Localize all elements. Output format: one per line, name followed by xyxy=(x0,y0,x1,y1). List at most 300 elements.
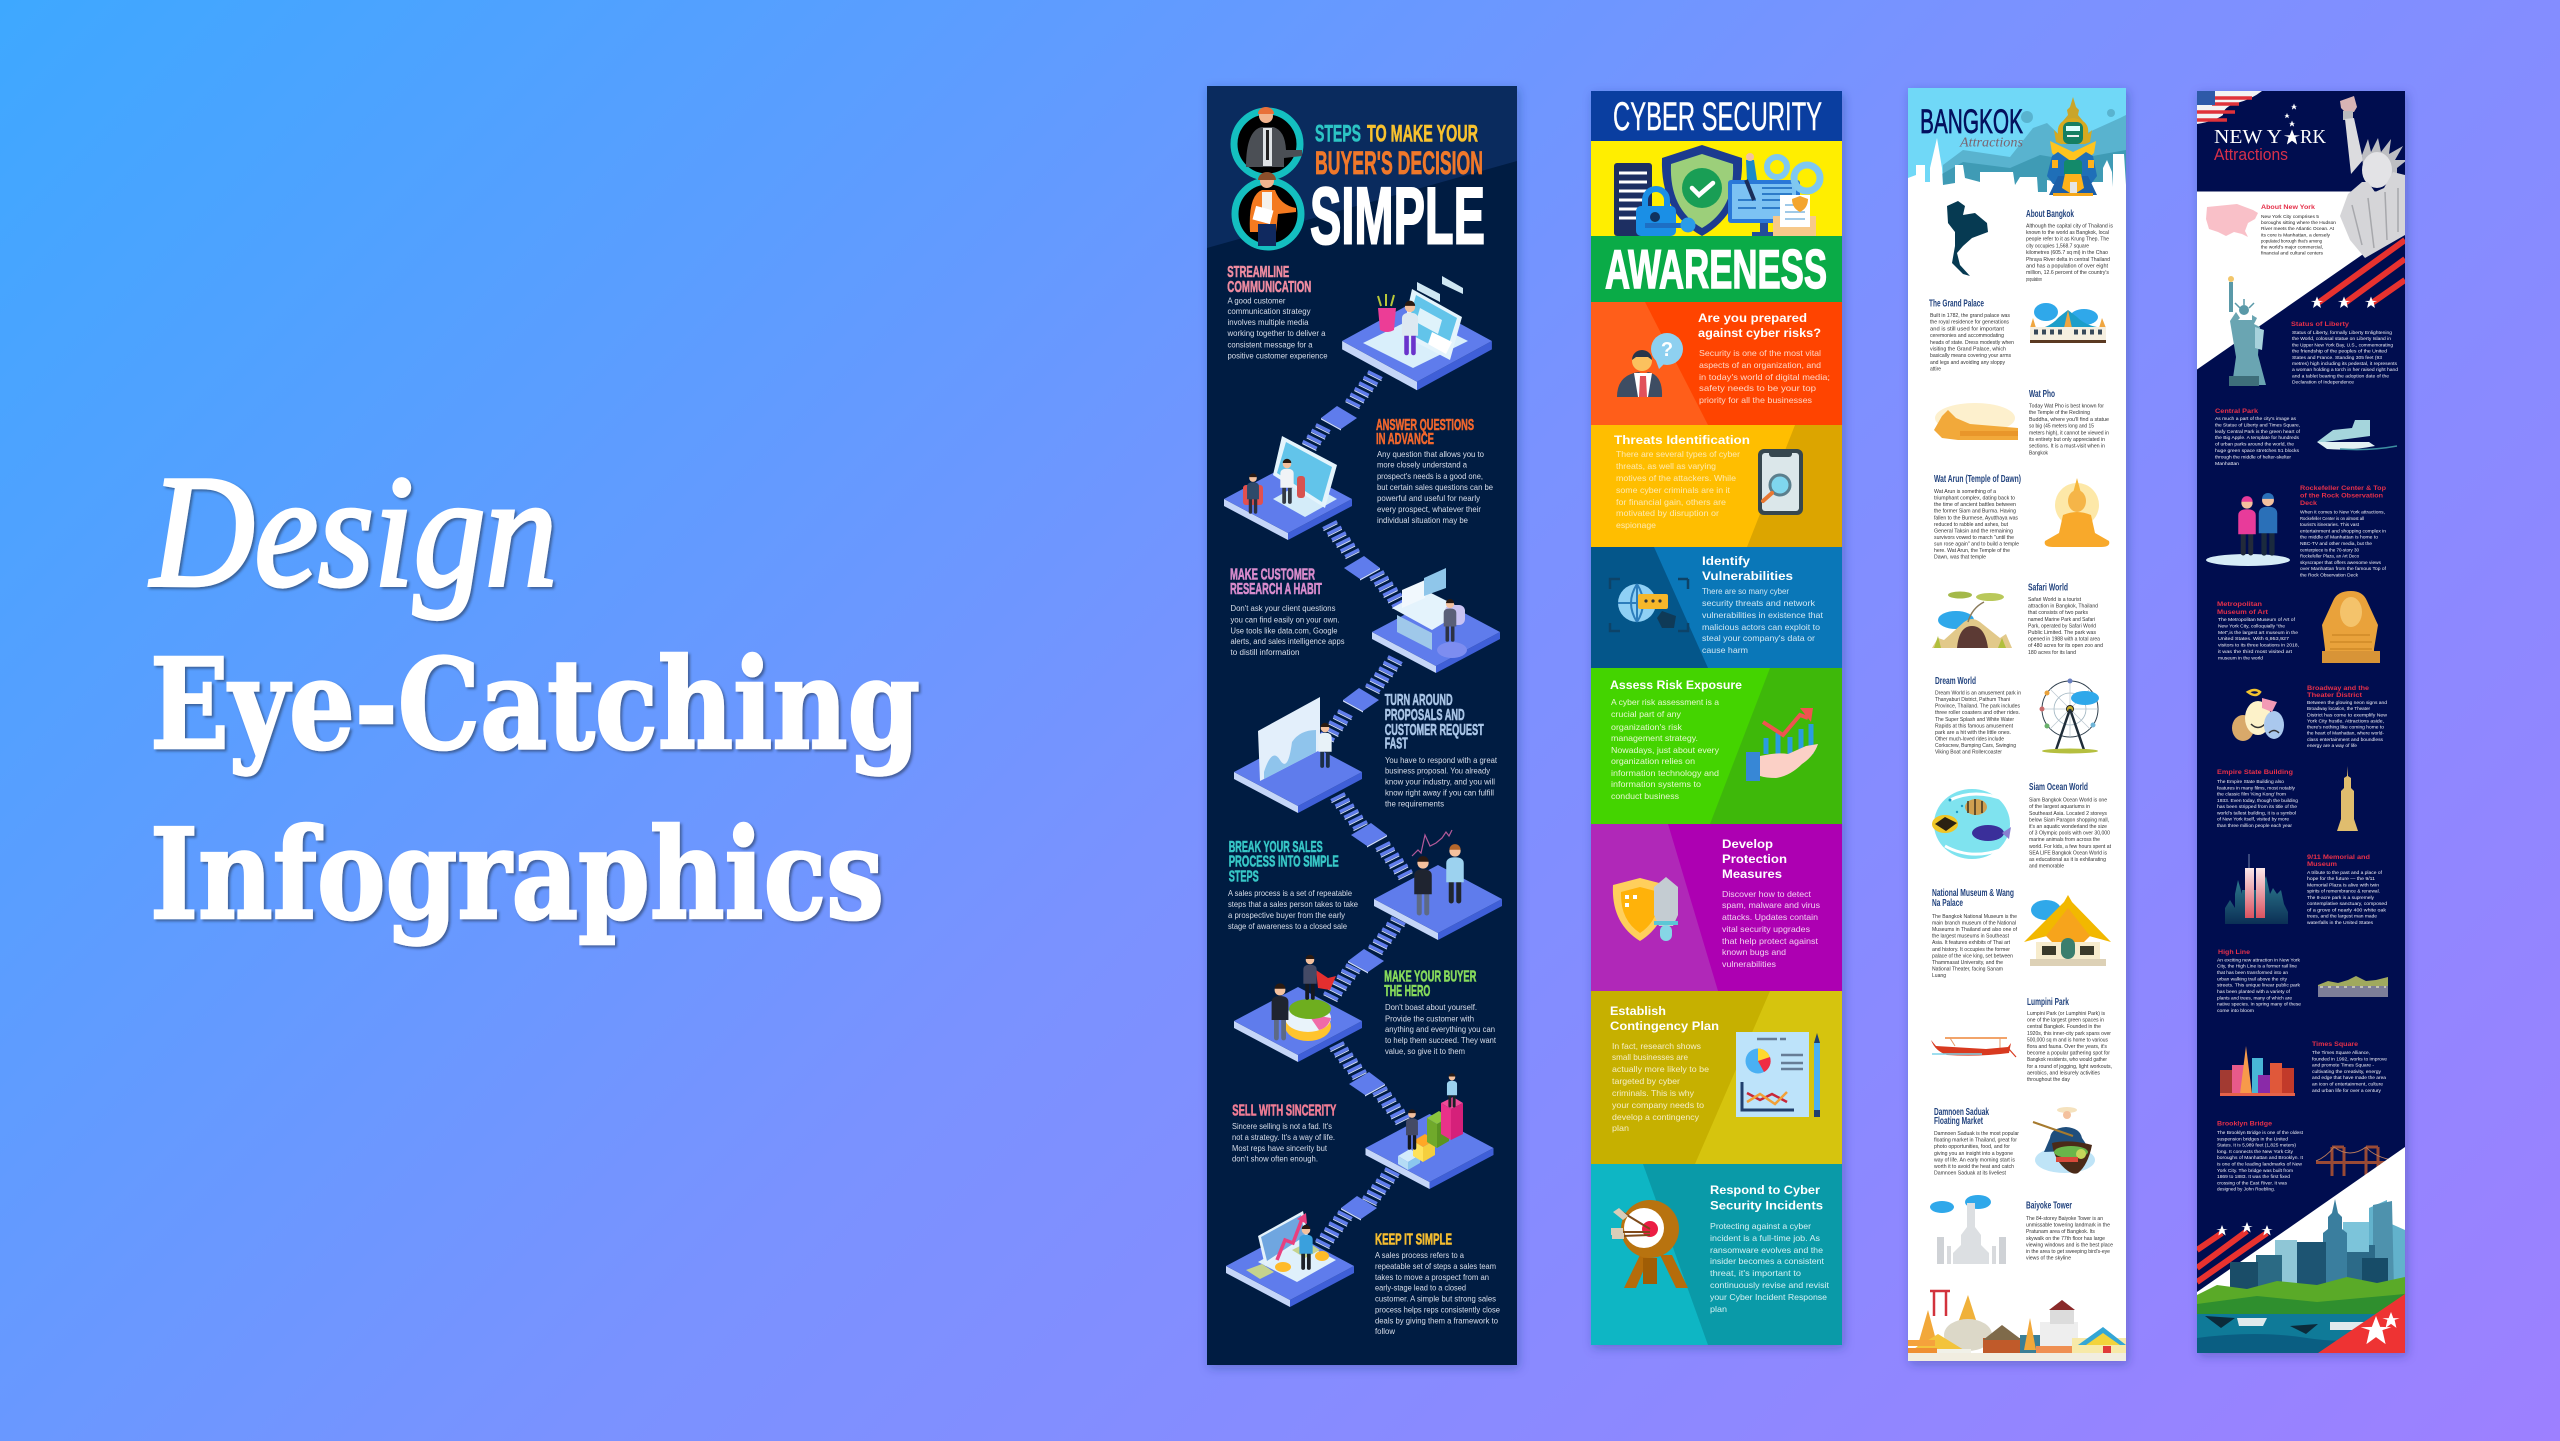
block: About Bangkok: city occupies 1,568.7 square xyxy=(2026,243,2089,249)
section: identify vulnerabilities: steal your company's data or xyxy=(1702,633,1815,643)
section: establish contingency plan: actually more likely to be xyxy=(1612,1064,1709,1074)
illustration: floating market boat xyxy=(2033,1107,2095,1174)
block: Central Park: As much a part of the city's image as xyxy=(2215,416,2297,422)
heading: steps to make your buyer's decision simple: TO MAKE YOUR xyxy=(1367,120,1478,148)
step 8 text: deals by giving them a framework to xyxy=(1375,1316,1499,1326)
block: National Museum: The Bangkok National Museum is the xyxy=(1932,914,2017,920)
block: Metropolitan Museum of Art: it was the third most visited art xyxy=(2218,649,2293,655)
block: Statue of Liberty: Status of Liberty xyxy=(2291,321,2349,328)
block: Siam Ocean World: it's an aquatic wonderland the size xyxy=(2029,824,2107,830)
section: assess risk exposure: A cyber risk assessment is a xyxy=(1611,697,1719,707)
block: Dream World: three roller coasters and other rides. xyxy=(1935,710,2020,716)
block: Brooklyn Bridge: The Brooklyn Bridge is one of the oldest xyxy=(2217,1130,2304,1136)
step 4 text: business proposal. You already xyxy=(1385,767,1490,776)
block: Empire State Building: world's tallest building, it is a symbol xyxy=(2217,810,2296,816)
block: National Museum: and history. It occupies the former xyxy=(1932,947,2010,953)
section: are you prepared xyxy=(1591,302,1842,425)
step 4 text: know your industry, and you will xyxy=(1385,778,1495,787)
step 5 text: steps that a sales person takes to take xyxy=(1228,900,1359,909)
block: Siam Ocean World: of the largest aquariums in xyxy=(2029,804,2090,810)
block: Dream World: Dream World is an amusement park in xyxy=(1935,690,2021,696)
block: Baiyoke Tower: viewing windows and is the best place xyxy=(2026,1242,2113,1248)
section: are you prepared: safety needs to be your top xyxy=(1699,383,1816,393)
step 7 text: Most reps have sincerity but xyxy=(1232,1144,1328,1153)
block: 9/11 Memorial: Memorial Plaza is alive with twin xyxy=(2307,882,2379,888)
section: are you prepared: priority for all the businesses xyxy=(1699,395,1812,405)
illustration: Times Square skyline xyxy=(2220,1046,2295,1096)
section: assess risk exposure: Nowadays, just about every xyxy=(1611,745,1720,755)
icon: report with charts and pen xyxy=(1736,1032,1820,1117)
block: Metropolitan Museum of Art: Museum of Art xyxy=(2217,609,2269,616)
block: Empire State Building xyxy=(2217,769,2298,829)
block: Times Square: founded in 1992, works to improve xyxy=(2312,1056,2387,1062)
step 8 text: KEEP IT SIMPLE xyxy=(1375,1231,1452,1248)
block: Empire State Building: has been stripped from its title of the xyxy=(2217,804,2297,810)
section: threats identification: for financial gain, others are xyxy=(1616,497,1726,507)
step 1 text: positive customer experience xyxy=(1228,351,1328,360)
block: National Museum xyxy=(1932,887,2018,979)
block: Broadway: Broadway location, the Theater xyxy=(2307,706,2370,712)
illustration: twin towers memorial xyxy=(2225,854,2288,924)
block: Times Square: an icon of entertainment, culture xyxy=(2312,1082,2383,1088)
block: 9/11 Memorial: hope for the future — the 9/11 xyxy=(2307,876,2375,882)
block: Baiyoke Tower: Pratunam area of Bangkok. Its xyxy=(2026,1229,2096,1235)
step 7 text: Sincere selling is not a fad. It's xyxy=(1232,1122,1332,1131)
block: About New York: the world's major commercial, xyxy=(2261,244,2323,250)
block: Metropolitan Museum of Art: The Metropolitan Museum of Art of xyxy=(2218,617,2296,623)
block: Lumpini Park: flora and fauna. Over the years, it's xyxy=(2027,1044,2108,1050)
section: develop protection measures: Measures xyxy=(1722,867,1782,881)
block: Brooklyn Bridge: crossing of the East River. It was xyxy=(2217,1180,2288,1186)
heading: New York: NEW Y xyxy=(2214,127,2282,148)
icon: giant guardian statue xyxy=(2047,97,2097,196)
block: About New York: About New York xyxy=(2261,204,2315,211)
block: Broadway: District has come to exemplify New xyxy=(2307,712,2387,718)
block: Metropolitan Museum of Art: museum in the world xyxy=(2218,655,2263,661)
section: develop protection measures: spam, malware and virus xyxy=(1722,900,1820,910)
block: Metropolitan Museum of Art: Met",is the largest art museum in the xyxy=(2218,630,2298,636)
illustration: Empire State Building xyxy=(2337,766,2358,831)
block: Broadway: Between the glowing neon signs and xyxy=(2307,700,2387,706)
block: High Line: urban walking trail above the city xyxy=(2217,976,2288,982)
block: High Line: native species. In spring many of these xyxy=(2217,1002,2301,1008)
step 3 text: MAKE CUSTOMER xyxy=(1230,566,1315,584)
step 7 illustration: growing 3D bars xyxy=(1366,1073,1494,1189)
block: Rockefeller Center: Rockefeller Plaza, an Art Deco xyxy=(2300,554,2359,560)
section: assess risk exposure xyxy=(1591,668,1842,824)
block: Damnoen Saduak: floating market in Thailand, great for xyxy=(1934,1138,2017,1144)
section: assess risk exposure: crucial part of any xyxy=(1611,709,1682,719)
heading: steps to make your buyer's decision simple: STEPS xyxy=(1315,120,1361,148)
block: Broadway: class entertainment and boundless xyxy=(2307,737,2384,743)
block: Times Square: and promote Times Square - xyxy=(2312,1063,2374,1069)
block: Damnoen Saduak: Damnoen Saduak xyxy=(1934,1106,1989,1118)
block: National Museum: National Theater, facing Sanam xyxy=(1932,966,2003,972)
step 7 text: SELL WITH SINCERITY xyxy=(1232,1103,1336,1120)
illustration: ice skating couple xyxy=(2206,493,2290,566)
block: Statue of Liberty: the Upper New York Bay, U.S., commemorating xyxy=(2292,342,2393,348)
block: About Bangkok: people refer to it as Krung Thep. The xyxy=(2026,237,2109,243)
block: Wat Arun: reduced to rabble and ashes, but xyxy=(1934,522,2009,528)
block: National Museum: palace of the vice king, set between xyxy=(1932,953,2013,959)
step 1 text xyxy=(1227,264,1328,360)
illustration: Thai palace xyxy=(2024,895,2111,966)
block: Safari World: named Marine Park and Safari xyxy=(2028,617,2095,623)
step 7 text: not a strategy. It's a way of life. xyxy=(1232,1133,1335,1142)
block: Lumpini Park: central Bangkok. Founded in the xyxy=(2027,1024,2101,1030)
panel: Bangkok attractions xyxy=(1905,88,2126,1361)
block: National Museum: Museums in Thailand and also one of xyxy=(1932,927,2018,933)
block: About New York: populated borough that's among xyxy=(2261,238,2322,244)
block: Broadway: energy are a way of life xyxy=(2307,743,2357,749)
section: respond to incidents xyxy=(1591,1164,1842,1345)
block: About Bangkok: million, 12.6 percent of the country's xyxy=(2026,270,2110,276)
title line: Eye-Catching: Eye-Catching xyxy=(150,632,920,778)
section: respond to incidents: insider becomes a consistent xyxy=(1710,1256,1825,1266)
block: Dream World: Thanyaburi District, Pathum Thani xyxy=(1935,697,2010,703)
block: 9/11 Memorial: waterfalls in the United States xyxy=(2307,920,2374,926)
section: assess risk exposure: organization relies on xyxy=(1611,756,1695,766)
block: Empire State Building: the classic film 'King Kong' from xyxy=(2217,792,2286,798)
step 1 text: involves multiple media xyxy=(1228,318,1309,327)
block: Central Park: of urban parks around the world, the xyxy=(2215,442,2294,448)
block: Lumpini Park: become a popular gathering spot for xyxy=(2027,1051,2110,1057)
block: The Grand Palace: heads of state. Dress modestly when xyxy=(1930,340,2014,346)
block: Brooklyn Bridge: Brooklyn Bridge xyxy=(2217,1120,2272,1128)
step 1 text: A good customer xyxy=(1228,296,1286,305)
title xyxy=(149,442,920,948)
heading: steps to make your buyer's decision simple: SIMPLE xyxy=(1310,172,1485,262)
block: About New York: its core is Manhattan, a densely xyxy=(2261,232,2331,238)
block: The Grand Palace: ceremonies and accommodating xyxy=(1930,333,2004,339)
step 6 text xyxy=(1384,968,1497,1056)
icon: statue of liberty bust xyxy=(2340,96,2407,258)
block: Central Park: the Statue of Liberty and Times Square, xyxy=(2215,422,2300,428)
illustration: white temple with clouds xyxy=(1930,1195,2006,1264)
block: Siam Ocean World: Southeast Asia. Located 2 storeys xyxy=(2029,811,2108,817)
section: develop protection measures: vital security upgrades xyxy=(1722,924,1810,934)
block: Baiyoke Tower: unmissable towering landmark in the xyxy=(2026,1223,2110,1229)
block: Brooklyn Bridge: 1869 to 1883. It was the first fixed xyxy=(2217,1174,2290,1180)
block: Rockefeller Center: tourist's itineraries. This vast xyxy=(2300,522,2360,528)
step 3 text: alerts, and sales intelligence apps xyxy=(1230,637,1344,646)
block: About Bangkok: and has a population of over eight xyxy=(2026,264,2109,270)
step 6 text: Provide the customer with xyxy=(1385,1014,1474,1023)
illustration: aquarium fish xyxy=(1932,789,2011,859)
step 4 text: the requirements xyxy=(1385,799,1444,808)
section: identify vulnerabilities: security threats and network xyxy=(1702,598,1816,608)
section: respond to incidents: threat, it's important to xyxy=(1710,1268,1801,1278)
step 4 text xyxy=(1385,692,1498,808)
section: develop protection measures: known bugs and xyxy=(1722,947,1786,957)
block: Rockefeller Center: Deck xyxy=(2300,500,2317,507)
block: Safari World: Safari World is a tourist xyxy=(2028,597,2082,603)
section: respond to incidents: plan xyxy=(1710,1304,1727,1314)
block: Brooklyn Bridge: designed by John Roebling. xyxy=(2217,1187,2275,1193)
illustration: High Line park xyxy=(2318,976,2388,997)
block: Broadway: there's nothing like coming home to xyxy=(2307,725,2384,731)
block: Dream World: Corkscrew, Bumping Cars, Swinging xyxy=(1935,743,2016,749)
section: establish contingency plan: criminals. This is why xyxy=(1612,1088,1695,1098)
block: The Grand Palace: visiting the Grand Palace, which xyxy=(1930,346,2006,352)
block: Rockefeller Center: of the Rock Observation xyxy=(2300,492,2383,500)
block: Empire State Building: than three million people each year xyxy=(2217,823,2292,829)
block: Wat Arun: triumphant complex, dating back to xyxy=(1934,496,2015,502)
icon: hand holding growth chart xyxy=(1746,708,1818,781)
block: Central Park: Manhattan xyxy=(2215,461,2239,467)
icon: person with question bubble xyxy=(1617,333,1683,397)
panel: cyber security awareness xyxy=(1591,91,1842,1345)
block: Safari World: opened in 1988 with a total area xyxy=(2028,637,2100,643)
section: assess risk exposure: Assess Risk Exposure xyxy=(1610,678,1742,692)
block: Rockefeller Center xyxy=(2300,485,2387,578)
red diagonal stripes with stars xyxy=(2311,240,2405,308)
block: 9/11 Memorial: spirits of remembrance & renewal. xyxy=(2307,889,2380,895)
section: develop protection measures: Discover how to detect xyxy=(1722,889,1812,899)
step 2 illustration: meeting on a laptop xyxy=(1224,436,1352,540)
section: identify vulnerabilities: cause harm xyxy=(1702,645,1748,655)
block: About Bangkok: Phraya River delta in central Thailand xyxy=(2026,257,2110,263)
block: Baiyoke Tower: Baiyoke Tower xyxy=(2026,1200,2072,1212)
block: Times Square: cultivating the creativity, energy xyxy=(2312,1069,2382,1075)
step 2 text: every prospect, whatever their xyxy=(1377,505,1481,514)
block: About Bangkok: population xyxy=(2026,277,2042,283)
block: Siam Ocean World xyxy=(2029,781,2112,870)
block: Statue of Liberty: States and France. Standing 305 feet (93 xyxy=(2292,355,2382,361)
section: are you prepared: Are you prepared xyxy=(1698,311,1807,325)
block: About New York: boroughs sitting where the Hudson xyxy=(2261,220,2336,226)
illustration: sphinx xyxy=(2322,591,2380,663)
heading: New York xyxy=(2214,104,2326,164)
illustration: cruise ship xyxy=(2317,420,2397,450)
block: National Museum: Thammasat University, and the xyxy=(1932,960,2003,966)
section: threats identification: Threats Identification xyxy=(1614,433,1750,447)
section: identify vulnerabilities: Vulnerabilities xyxy=(1702,569,1793,583)
icon: teal statue of liberty xyxy=(2228,276,2266,386)
block: Lumpini Park: Bangkok residents, who would gather xyxy=(2027,1057,2107,1063)
step 6 text: MAKE YOUR BUYER xyxy=(1384,968,1477,985)
section: develop protection measures: attacks. Updates contain xyxy=(1722,912,1818,922)
block: Empire State Building: 1933. Even today, though the building xyxy=(2217,798,2298,804)
block: Rockefeller Center: over Manhattan from the famous Top of xyxy=(2300,566,2387,572)
block: Dream World: The Super Splash and White Water xyxy=(1935,717,2014,723)
block: The Grand Palace: basically means covering your arms xyxy=(1930,353,2012,359)
section: threats identification: motivated by disruption or xyxy=(1616,508,1719,518)
heading: New York: Attractions xyxy=(2214,145,2288,164)
block: 9/11 Memorial: contemplative sanctuary, composed xyxy=(2307,901,2387,907)
section: threats identification: some cyber criminals are in it xyxy=(1616,485,1731,495)
section: develop protection measures: Develop xyxy=(1722,837,1773,851)
block: Dream World: Rapids at this famous amusement xyxy=(1935,723,2014,729)
block: Rockefeller Center: When it comes to New York attractions, xyxy=(2300,510,2385,516)
block: Damnoen Saduak: worth it to avoid the heat and catch xyxy=(1934,1164,2014,1170)
block: The Grand Palace xyxy=(1929,297,2014,373)
icon: Thailand map xyxy=(1947,201,1988,276)
block: Wat Arun xyxy=(1934,473,2021,561)
section: identify vulnerabilities: There are so many cyber xyxy=(1702,586,1789,596)
block: High Line: City, the High Line is a former rail line xyxy=(2217,964,2297,970)
block: Safari World: 180 acres for its land xyxy=(2028,650,2076,656)
panel: sales steps infographic xyxy=(1207,86,1517,1365)
block: The Grand Palace: and legs and avoiding any sloppy xyxy=(1930,360,2005,366)
block: High Line: has been planted with a variety of xyxy=(2217,989,2291,995)
block: National Museum: main branch museum of the National xyxy=(1932,921,2016,927)
block: Brooklyn Bridge: suspension bridges in the United xyxy=(2217,1136,2288,1142)
step 3 text: you can find easily on your own. xyxy=(1230,616,1340,624)
block: Metropolitan Museum of Art xyxy=(2217,601,2299,661)
section: assess risk exposure: information technology and xyxy=(1611,768,1719,778)
block: Rockefeller Center: Rockefeller Center & Top xyxy=(2300,485,2386,492)
step 5 text: a prospective buyer from the early xyxy=(1228,911,1345,920)
block: Dream World: Province, Thailand. The park includes xyxy=(1935,704,2020,710)
block: Broadway: Broadway and the xyxy=(2307,685,2369,692)
section: are you prepared: against cyber risks? xyxy=(1698,326,1821,340)
section: respond to incidents: continuously revise and revisit xyxy=(1710,1280,1830,1290)
block: Times Square: and edge that have made the area xyxy=(2312,1075,2386,1081)
block: About Bangkok xyxy=(2026,208,2114,283)
block: Lumpini Park: one of the largest green spaces in xyxy=(2027,1018,2104,1024)
section: are you prepared: aspects of an organization, and xyxy=(1699,360,1821,370)
block: Lumpini Park: for a round of jogging, light workouts, xyxy=(2027,1064,2112,1070)
block: Broadway: York City hustle. Attractions aside, xyxy=(2307,718,2384,724)
block: Wat Pho: Today Wat Pho is best known for xyxy=(2029,404,2104,410)
step 5 text: PROCESS INTO SIMPLE xyxy=(1229,854,1339,871)
block: About New York: New York City comprises 5 xyxy=(2261,214,2319,220)
section: establish contingency plan: In fact, research shows xyxy=(1612,1041,1701,1051)
block: Central Park: huge green space stretches 51 blocks xyxy=(2215,448,2300,454)
block: Statue of Liberty: the World, colossal statue on Liberty Island in xyxy=(2292,336,2391,342)
step 4 text: You have to respond with a great xyxy=(1385,756,1498,765)
section: establish contingency plan: plan xyxy=(1612,1123,1629,1133)
illustration: Bangkok landmarks skyline xyxy=(1905,1291,2126,1361)
block: About New York xyxy=(2261,204,2336,257)
block: Dream World: Viking Boat and Rollercoaster xyxy=(1935,750,2002,756)
section: threats identification: There are several types of cyber xyxy=(1616,449,1740,459)
section: establish contingency plan: small businesses are xyxy=(1612,1052,1688,1062)
step 6 text: anything and everything you can xyxy=(1385,1025,1495,1034)
block: Wat Arun: Wat Arun is something of a xyxy=(1934,489,1996,495)
block: 9/11 Memorial: The 8-acre park is a supremely xyxy=(2307,895,2375,901)
illustration: theatre masks xyxy=(2232,690,2284,741)
section: threats identification: espionage xyxy=(1616,520,1656,530)
block: Wat Pho: its entirety but only appreciated in xyxy=(2029,437,2105,443)
step 3 text xyxy=(1230,566,1344,657)
block: High Line: come into bloom xyxy=(2217,1008,2254,1014)
block: Damnoen Saduak: photo opportunities, food, and for xyxy=(1934,1144,2010,1150)
block: Siam Ocean World: as educational as it is exhilarating xyxy=(2029,857,2106,863)
icon: person with question bubble: ? xyxy=(1661,339,1673,361)
block: Metropolitan Museum of Art: New York City, colloquially "the xyxy=(2218,623,2285,629)
block: Dream World: Other much-loved rides include xyxy=(1935,736,2004,742)
step 3 text: Don't ask your client questions xyxy=(1230,604,1336,613)
block: Wat Pho: the Temple of the Reclining xyxy=(2029,410,2090,416)
block: The Grand Palace: and is still used for important xyxy=(1930,326,2005,332)
block: Wat Pho: Wat Pho xyxy=(2029,388,2055,400)
step 2 text: Any question that allows you to xyxy=(1377,450,1485,459)
block: Safari World: that consists of two parks xyxy=(2028,610,2089,616)
section: respond to incidents: Respond to Cyber xyxy=(1710,1183,1820,1197)
block: About Bangkok: About Bangkok xyxy=(2026,208,2074,220)
block: Damnoen Saduak: Damnoen Saduak at its liveliest xyxy=(1934,1171,2007,1177)
block: Rockefeller Center: entertainment and shopping complex in xyxy=(2300,528,2386,534)
block: Dream World: Dream World xyxy=(1935,675,1976,687)
block: 9/11 Memorial: 9/11 Memorial and xyxy=(2307,854,2370,861)
block: Siam Ocean World: and memorable xyxy=(2029,864,2064,870)
block: 9/11 Memorial: Museum xyxy=(2307,861,2337,868)
block: Times Square: and urban life for over a century xyxy=(2312,1088,2382,1094)
block: Safari World: Park, operated by Safari World xyxy=(2028,623,2096,629)
block: High Line: plants and trees, many of which are xyxy=(2217,995,2292,1001)
block: Times Square: The Times Square Alliance, xyxy=(2312,1050,2370,1056)
block: Rockefeller Center: centerpiece is the 70-story 30 xyxy=(2300,547,2359,553)
block: Brooklyn Bridge: States. It is 5,989 feet (1,825 meters) xyxy=(2217,1143,2296,1149)
block: Lumpini Park: throughout the day xyxy=(2027,1077,2071,1083)
step 4 illustration: proposal chart board xyxy=(1234,697,1362,813)
icon: archery target xyxy=(1611,1200,1688,1288)
title line: Design: Design xyxy=(149,442,557,620)
block: National Museum: Luang xyxy=(1932,973,1946,979)
step 1 text: working together to deliver a xyxy=(1227,329,1326,338)
block: Lumpini Park: Lumpini Park xyxy=(2027,996,2069,1008)
block: Central Park: leafy Central Park is the green heart of xyxy=(2215,429,2301,435)
section: respond to incidents: Protecting against a cyber xyxy=(1710,1221,1811,1231)
step 8 text: early-stage lead to a closed xyxy=(1375,1283,1466,1292)
block: Metropolitan Museum of Art: United States. With 6,953,927 xyxy=(2218,636,2289,642)
block: Brooklyn Bridge: boroughs of Manhattan and Brooklyn. It xyxy=(2217,1155,2304,1161)
step 7 text xyxy=(1232,1103,1336,1163)
step 8 text: repeatable set of steps a sales team xyxy=(1375,1262,1496,1271)
block: Safari World: of 480 acres for its open zoo and xyxy=(2028,643,2103,649)
block: Lumpini Park: 500,000 sq m and is home to various xyxy=(2027,1037,2108,1043)
block: Central Park: through the middle of helter-skelter xyxy=(2215,454,2291,460)
block: Central Park: the Big Apple. A template for hundreds xyxy=(2215,435,2300,441)
block: Wat Arun: here. Wat Arun, the Temple of the xyxy=(1934,548,2010,554)
step 8 text xyxy=(1375,1231,1501,1336)
block: National Museum: Asia. It features exhibits of Thai art xyxy=(1932,940,2011,946)
block: Baiyoke Tower xyxy=(2026,1200,2113,1262)
block: Statue of Liberty: Status of Liberty, formally Liberty Enlightening xyxy=(2292,330,2392,336)
section: develop protection measures: Protection xyxy=(1722,852,1787,866)
section: identify vulnerabilities: malicious actors can exploit to xyxy=(1702,622,1820,632)
block: Safari World: attraction in Bangkok, Thailand xyxy=(2028,604,2098,610)
section: identify vulnerabilities: Identify xyxy=(1702,554,1750,568)
heading: steps to make your buyer's decision simple: BUYER'S DECISION xyxy=(1315,145,1483,181)
step 1 text: consistent message for a xyxy=(1228,340,1313,350)
step 8 text: A sales process refers to a xyxy=(1375,1251,1465,1260)
block: Statue of Liberty: and a tablet bearing the adoption date of the xyxy=(2292,373,2389,379)
block: High Line: High Line xyxy=(2218,949,2250,956)
step 5 illustration: handshake and line chart xyxy=(1374,830,1502,940)
block: Wat Pho: Buddha, where you'll find a statue xyxy=(2029,417,2109,423)
section: establish contingency plan: targeted by cyber xyxy=(1612,1076,1680,1086)
block: Wat Arun: Wat Arun (Temple of Dawn) xyxy=(1934,473,2021,485)
block: Brooklyn Bridge xyxy=(2217,1120,2304,1193)
block: Empire State Building: Empire State Building xyxy=(2217,769,2293,776)
block: Safari World: Safari World xyxy=(2028,582,2068,594)
section: assess risk exposure: management strategy. xyxy=(1611,733,1698,743)
step 8 illustration: laptop, growth arrow and money xyxy=(1226,1211,1354,1307)
illustration: seated Buddha xyxy=(2045,478,2109,547)
block: Siam Ocean World: Siam Ocean World xyxy=(2029,781,2088,793)
step 5 text: BREAK YOUR SALES xyxy=(1229,839,1323,856)
bottom scene: city, park, water and stripes xyxy=(2197,1147,2405,1353)
header: sky, skyline, title and guardian statue: BANGKOK xyxy=(1920,103,2023,141)
block: Rockefeller Center: skyscraper that offers awesome views xyxy=(2300,560,2382,566)
section: are you prepared: in today's world of digital media; xyxy=(1699,372,1830,382)
block: High Line: streets. This unique linear public park xyxy=(2217,983,2301,989)
section: assess risk exposure: conduct business xyxy=(1611,791,1679,801)
block: Broadway: the heart of Manhattan, where world- xyxy=(2307,731,2384,737)
